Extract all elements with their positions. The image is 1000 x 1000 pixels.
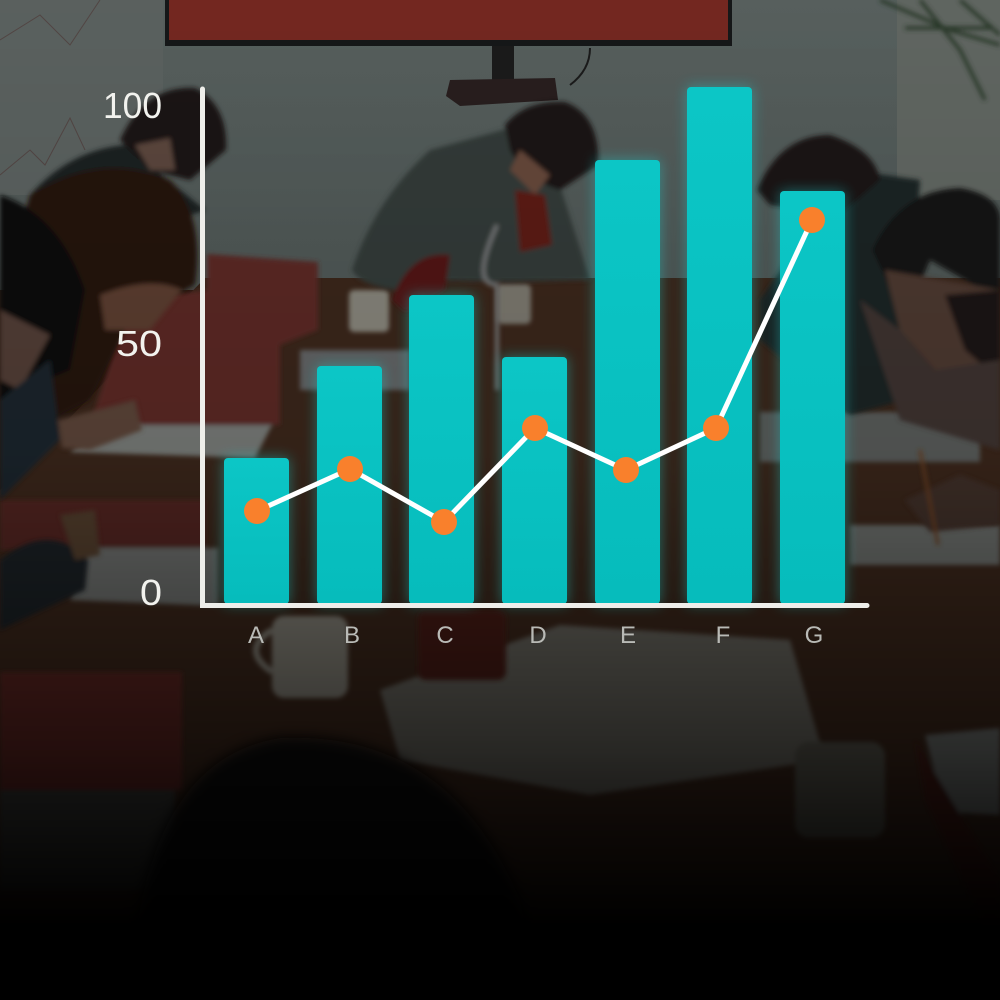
person: left top	[30, 145, 205, 240]
x axis labels: B	[344, 622, 360, 649]
wall screen	[165, 0, 732, 46]
mugs	[256, 284, 885, 838]
y axis labels	[103, 85, 162, 613]
right column and plant	[880, 0, 1000, 200]
bar C	[409, 295, 474, 604]
x axis labels: A	[248, 622, 264, 649]
bar B	[317, 366, 382, 604]
bar D	[502, 357, 567, 604]
bar A	[224, 458, 289, 604]
person: right front	[872, 188, 1000, 320]
whiteboard	[0, 0, 163, 195]
x axis labels: D	[529, 622, 547, 649]
bars glow	[224, 87, 845, 604]
trend line	[257, 220, 812, 522]
x axis labels: C	[436, 622, 454, 649]
y axis labels: 100	[103, 85, 162, 126]
person: centre	[352, 128, 590, 290]
screen mount and shelf	[446, 46, 590, 106]
x axis labels: F	[716, 622, 730, 649]
chart	[103, 85, 867, 649]
bar G	[780, 191, 845, 604]
y axis labels: 50	[116, 323, 162, 364]
x axis labels	[248, 622, 823, 649]
y axis labels: 0	[140, 572, 162, 613]
x axis labels: G	[805, 622, 823, 649]
person: left edge	[0, 195, 85, 400]
axes	[202, 89, 867, 606]
table	[0, 278, 1000, 1000]
red folders and papers	[0, 254, 1000, 960]
bar E	[595, 160, 660, 604]
data points	[244, 207, 825, 535]
person: curly hair	[0, 168, 197, 420]
red lamp	[515, 190, 552, 252]
x axis labels: E	[620, 622, 636, 649]
foreground head	[130, 738, 540, 1000]
bar F	[687, 87, 752, 604]
person: back right	[760, 170, 920, 415]
